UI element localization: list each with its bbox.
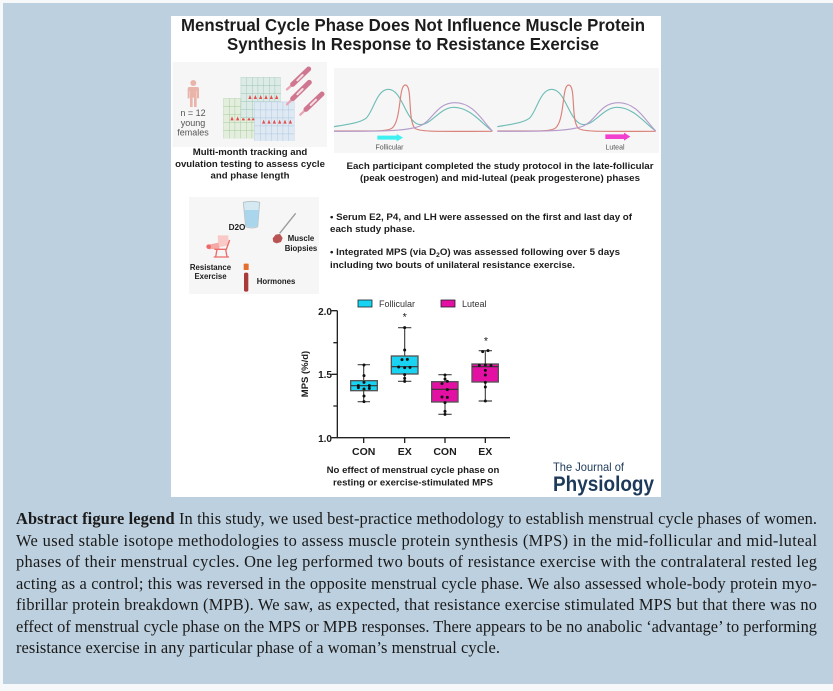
caption: tracking bbox=[175, 147, 325, 182]
text block: abstract figure legend: effect of menstrual cycle phase on the MPS or MPB responses. There appears to be no anabolic ‘advantage’ to performing bbox=[16, 617, 817, 636]
panel background bbox=[172, 62, 327, 147]
significance star: * bbox=[484, 335, 488, 347]
calendar: teal bbox=[241, 77, 281, 118]
significance star: * bbox=[403, 311, 407, 323]
label: resistance exercise: Resistance bbox=[190, 263, 232, 272]
icon: resistance exercise machine bbox=[206, 235, 230, 257]
x axis labels: CON bbox=[433, 446, 457, 458]
box plot: MPS bbox=[300, 307, 510, 458]
panel background bbox=[334, 68, 659, 153]
text block: methods bullets: each study phase. bbox=[330, 224, 415, 235]
panel: assessments bbox=[189, 197, 319, 294]
legend swatch: luteal bbox=[441, 300, 455, 307]
icon set, zoomed coordinates bbox=[206, 201, 296, 292]
caption: tracking: ovulation testing to assess cycle bbox=[175, 159, 325, 170]
y axis tick labels bbox=[318, 307, 332, 445]
box: follicular CON bbox=[351, 363, 377, 403]
icon: person bbox=[188, 80, 199, 107]
caption: study protocol: (peak oestrogen) and mid-luteal (peak progesterone) phases bbox=[360, 173, 640, 184]
participant text: n = 12 bbox=[180, 108, 206, 118]
x axis labels: EX bbox=[478, 446, 492, 458]
legend swatch: follicular bbox=[358, 300, 372, 307]
white figure panel bbox=[171, 16, 661, 497]
participant text: young bbox=[181, 118, 205, 128]
label: follicular: Follicular bbox=[375, 144, 404, 152]
text block: methods bullets: • Serum E2, P4, and LH were assessed on the first and last day of bbox=[330, 212, 633, 223]
text block: abstract figure legend: resistance exercise in any particular phase of a woman’s menstrual cycle. bbox=[16, 638, 500, 657]
title: Synthesis In Response to Resistance Exercise bbox=[227, 34, 599, 54]
chart legend bbox=[358, 299, 487, 309]
label: muscle biopsies: Muscle bbox=[288, 234, 315, 243]
caption: no effect: resting or exercise-stimulated MPS bbox=[333, 478, 494, 488]
label: resistance exercise bbox=[190, 263, 232, 281]
caption: tracking: Multi-month tracking and bbox=[193, 147, 307, 158]
title bbox=[181, 15, 645, 54]
calendar: green bbox=[223, 98, 256, 138]
arrow: follicular bbox=[377, 134, 403, 141]
legend label: luteal: Luteal bbox=[462, 299, 487, 309]
box: follicular EX bbox=[391, 311, 418, 383]
label: hormones: Hormones bbox=[257, 277, 296, 286]
box: luteal CON bbox=[432, 373, 458, 416]
axes bbox=[331, 311, 510, 443]
text block: abstract figure legend: We used stable isotope methodologies to assess muscle protein synthesis (MPS) in the mid-follicular and mid-luteal bbox=[16, 531, 817, 550]
caption: tracking: and phase length bbox=[211, 170, 290, 182]
icon: blood tube bbox=[244, 264, 249, 292]
icons: ovulation test strips bbox=[287, 69, 322, 115]
text block: methods bullets: O) was assessed following over 5 days bbox=[440, 247, 620, 258]
y axis title: MPS (%/d) bbox=[300, 351, 311, 397]
label: muscle biopsies: Biopsies bbox=[285, 244, 318, 253]
text block: abstract figure legend: acting as a control; this was reversed in the opposite menstrual cycle phase. We also assessed whole-body protein myo- bbox=[16, 574, 817, 593]
logo: The Journal of Physiology: Physiology bbox=[553, 472, 654, 496]
text block: methods bullets: 2 bbox=[436, 252, 440, 259]
participant text: females bbox=[177, 128, 209, 138]
y axis tick labels: 1.5 bbox=[318, 370, 332, 381]
text block: methods bullets: • Integrated MPS (via D bbox=[330, 247, 435, 258]
icons: person and calendars, zoomed coordinates bbox=[188, 69, 322, 141]
legend label: follicular: Follicular bbox=[379, 299, 415, 309]
axes and plot elements bbox=[331, 311, 510, 443]
logo: The Journal of Physiology bbox=[553, 460, 654, 496]
participant text bbox=[177, 108, 209, 138]
icon: muscle sample bbox=[273, 234, 283, 243]
label: D2O: D2O bbox=[229, 223, 246, 232]
x axis labels bbox=[352, 446, 492, 458]
text block: abstract figure legend bbox=[16, 509, 817, 657]
icon: biopsy needle bbox=[280, 213, 296, 233]
text block: abstract figure legend: Abstract figure legend In this study, we used best-practice methodology to establish menstrual cycle phases of women. bbox=[16, 509, 817, 528]
icon: water glass bbox=[243, 201, 260, 228]
panel: hormone curves bbox=[334, 68, 659, 184]
label: luteal: Luteal bbox=[605, 144, 625, 152]
title: Menstrual Cycle Phase Does Not Influence Muscle Protein bbox=[181, 15, 645, 35]
y axis tick labels: 1.0 bbox=[318, 434, 332, 445]
panel background bbox=[189, 197, 319, 294]
box: luteal EX bbox=[472, 335, 498, 402]
y axis tick labels: 2.0 bbox=[318, 307, 332, 318]
calendar: blue bbox=[254, 102, 294, 141]
text block: abstract figure legend: fibrillar protein breakdown (MPB). We saw, as expected, that resistance exercise stimulated MPS but that there was no bbox=[16, 595, 817, 614]
text block: methods bullets bbox=[330, 212, 633, 271]
chart: cycle curves bbox=[334, 85, 656, 141]
panel: participant tracking bbox=[172, 62, 327, 182]
x axis labels: CON bbox=[352, 446, 375, 458]
x axis labels: EX bbox=[398, 446, 412, 458]
figure: graphical abstract bbox=[171, 15, 661, 497]
caption: study protocol bbox=[346, 161, 654, 184]
label: muscle biopsies bbox=[285, 234, 318, 253]
text block: abstract figure legend: phases of their menstrual cycles. One leg performed two bouts of resistance exercise with the contralateral rested leg bbox=[16, 552, 817, 571]
caption: no effect: No effect of menstrual cycle phase on bbox=[327, 465, 500, 476]
logo: The Journal of Physiology: The Journal of bbox=[553, 460, 625, 474]
caption: no effect bbox=[327, 465, 500, 488]
caption: study protocol: Each participant completed the study protocol in the late-follicular bbox=[346, 161, 654, 172]
arrow: luteal bbox=[605, 133, 630, 141]
label: resistance exercise: Exercise bbox=[194, 272, 227, 281]
text block: methods bullets: including two bouts of unilateral resistance exercise. bbox=[330, 260, 575, 271]
